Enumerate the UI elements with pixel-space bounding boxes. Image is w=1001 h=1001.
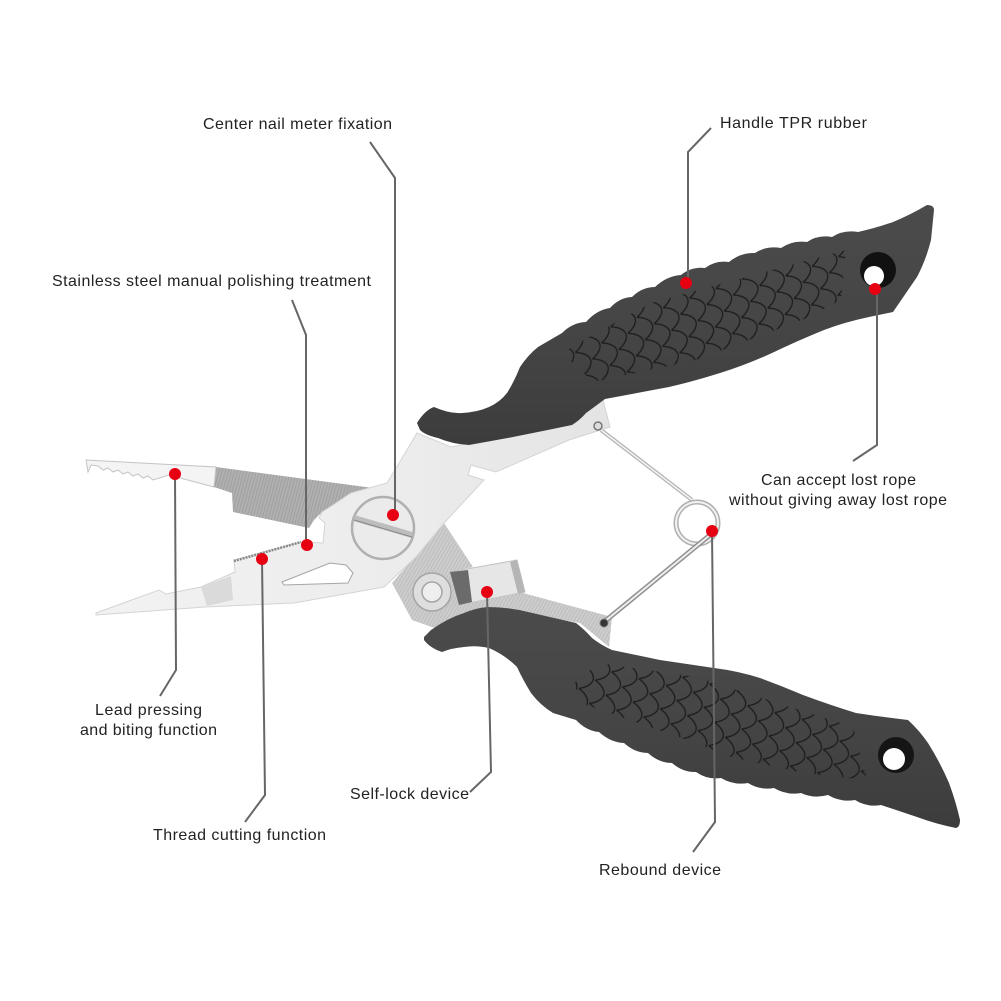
jaw shading (201, 576, 233, 606)
label: rebound: Rebound device (599, 862, 721, 879)
lower handle (424, 607, 960, 828)
rear jaw with file texture (214, 467, 373, 528)
hole in front blade (282, 563, 353, 585)
serrated edge (234, 542, 301, 561)
leader: lead pressing (160, 474, 176, 696)
label: lead pressing: Lead pressing (95, 702, 202, 719)
leader: rebound (693, 531, 715, 852)
lanyard hole (860, 252, 896, 288)
rear jaw tip with teeth (86, 460, 216, 487)
grip scales lower (575, 664, 866, 778)
label: lead pressing: and biting function (80, 722, 217, 739)
spring wire (601, 430, 718, 622)
label: center nail: Center nail meter fixation (203, 116, 392, 133)
center pivot screw (352, 497, 414, 559)
rear arm and lower steel lever (392, 523, 612, 647)
leader: self-lock (470, 592, 491, 792)
label: self-lock: Self-lock device (350, 786, 469, 803)
spring rivet upper (594, 422, 602, 430)
self-lock clip (450, 560, 525, 605)
leader: lost rope (853, 288, 877, 461)
leader: handle rubber (688, 128, 711, 283)
label: handle rubber: Handle TPR rubber (720, 115, 868, 132)
label: stainless steel: Stainless steel manual polishing treatment (52, 273, 372, 290)
spring rivet lower (600, 619, 608, 627)
leader: thread cutting (245, 559, 265, 822)
red markers (169, 277, 881, 598)
label: thread cutting: Thread cutting function (153, 827, 326, 844)
label: lost rope: Can accept lost rope (761, 472, 916, 489)
upper handle (417, 205, 934, 445)
leader: stainless steel (292, 300, 306, 545)
leader: center nail (370, 142, 395, 515)
label: lost rope: without giving away lost rope (728, 492, 947, 509)
grip scales upper (568, 250, 846, 381)
self-lock bolt (413, 573, 451, 611)
illustration: fishing pliers (86, 205, 960, 828)
front steel blade (96, 400, 610, 615)
label: lead pressing (80, 702, 217, 739)
lanyard hole lower (878, 737, 914, 773)
label: lost rope (728, 472, 947, 509)
